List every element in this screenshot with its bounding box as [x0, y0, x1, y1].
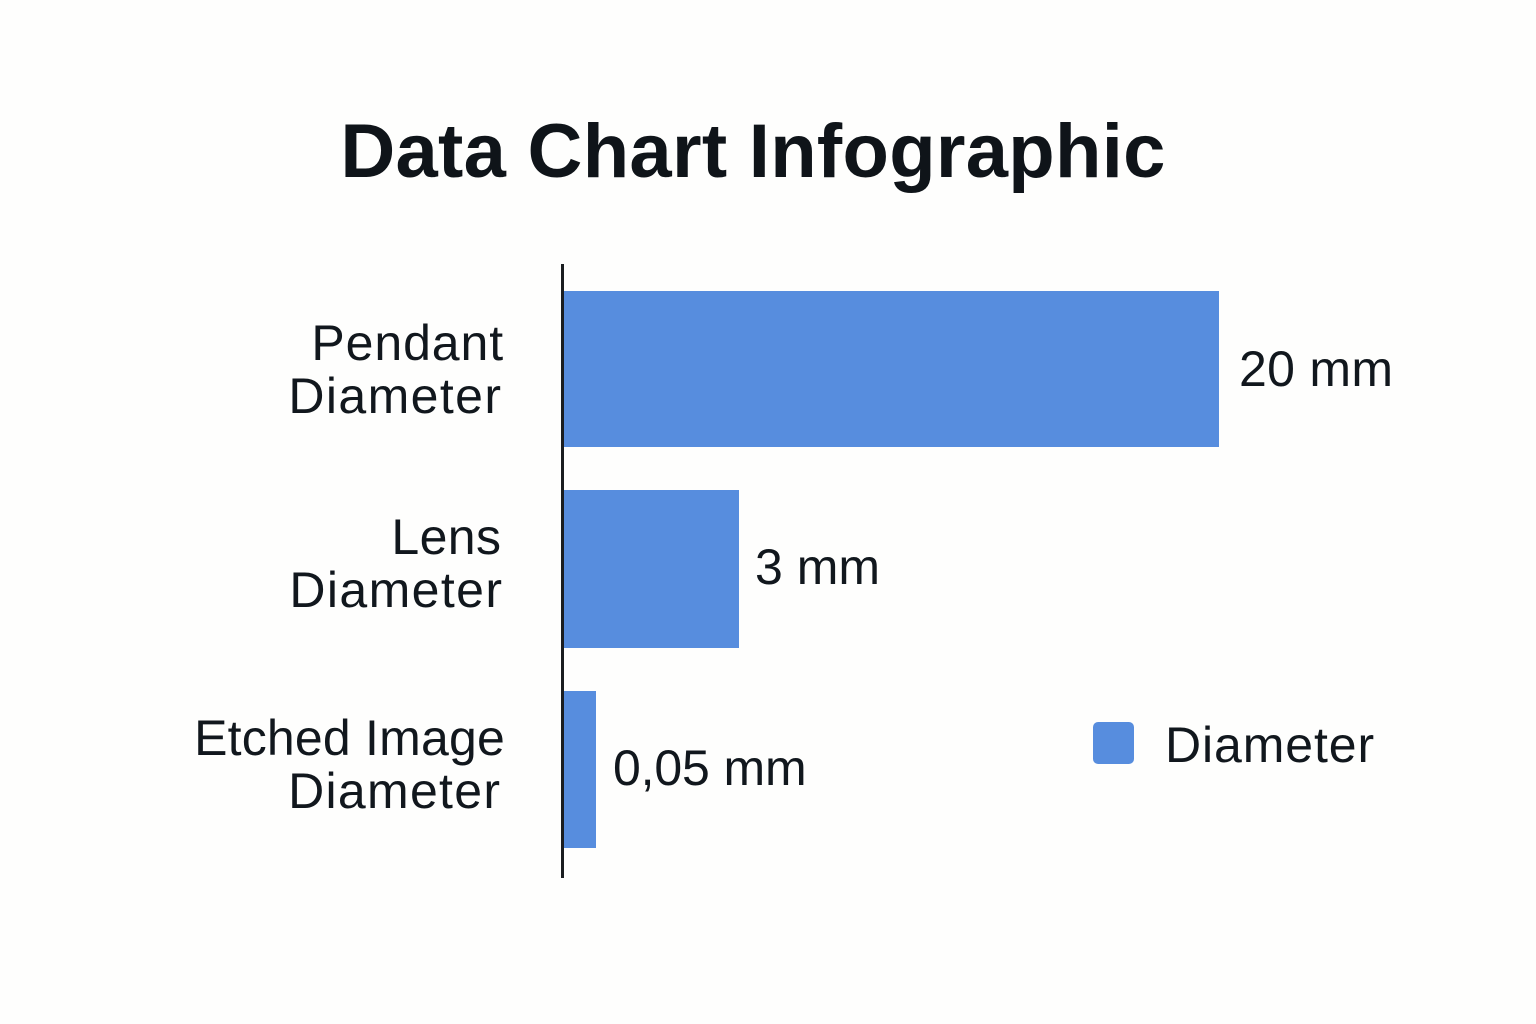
- legend: [1093, 717, 1375, 773]
- value: 0,05 mm: 0,05 mm: [613, 740, 806, 796]
- label: pendant diameter: Pendant: [311, 315, 504, 371]
- label: etched image diameter: Diameter: [288, 763, 501, 819]
- y axis: [561, 264, 564, 878]
- label: etched image diameter: [194, 710, 505, 819]
- label: lens diameter: [289, 509, 503, 618]
- label: pendant diameter: [288, 315, 504, 424]
- bar: etched image diameter: [564, 691, 596, 848]
- label: lens diameter: Lens: [391, 509, 501, 565]
- bar: lens diameter: [564, 490, 739, 648]
- bar chart: [194, 264, 1393, 878]
- bar: pendant diameter: [564, 291, 1219, 447]
- label: etched image diameter: Etched Image: [194, 710, 505, 766]
- label: pendant diameter: Diameter: [288, 368, 502, 424]
- title: Data Chart Infographic: [340, 109, 1166, 194]
- legend swatch: [1093, 722, 1134, 764]
- value: 20 mm: 20 mm: [1239, 341, 1393, 397]
- label: lens diameter: Diameter: [289, 562, 503, 618]
- value: 3 mm: 3 mm: [755, 539, 880, 595]
- legend label: Diameter: [1165, 717, 1375, 773]
